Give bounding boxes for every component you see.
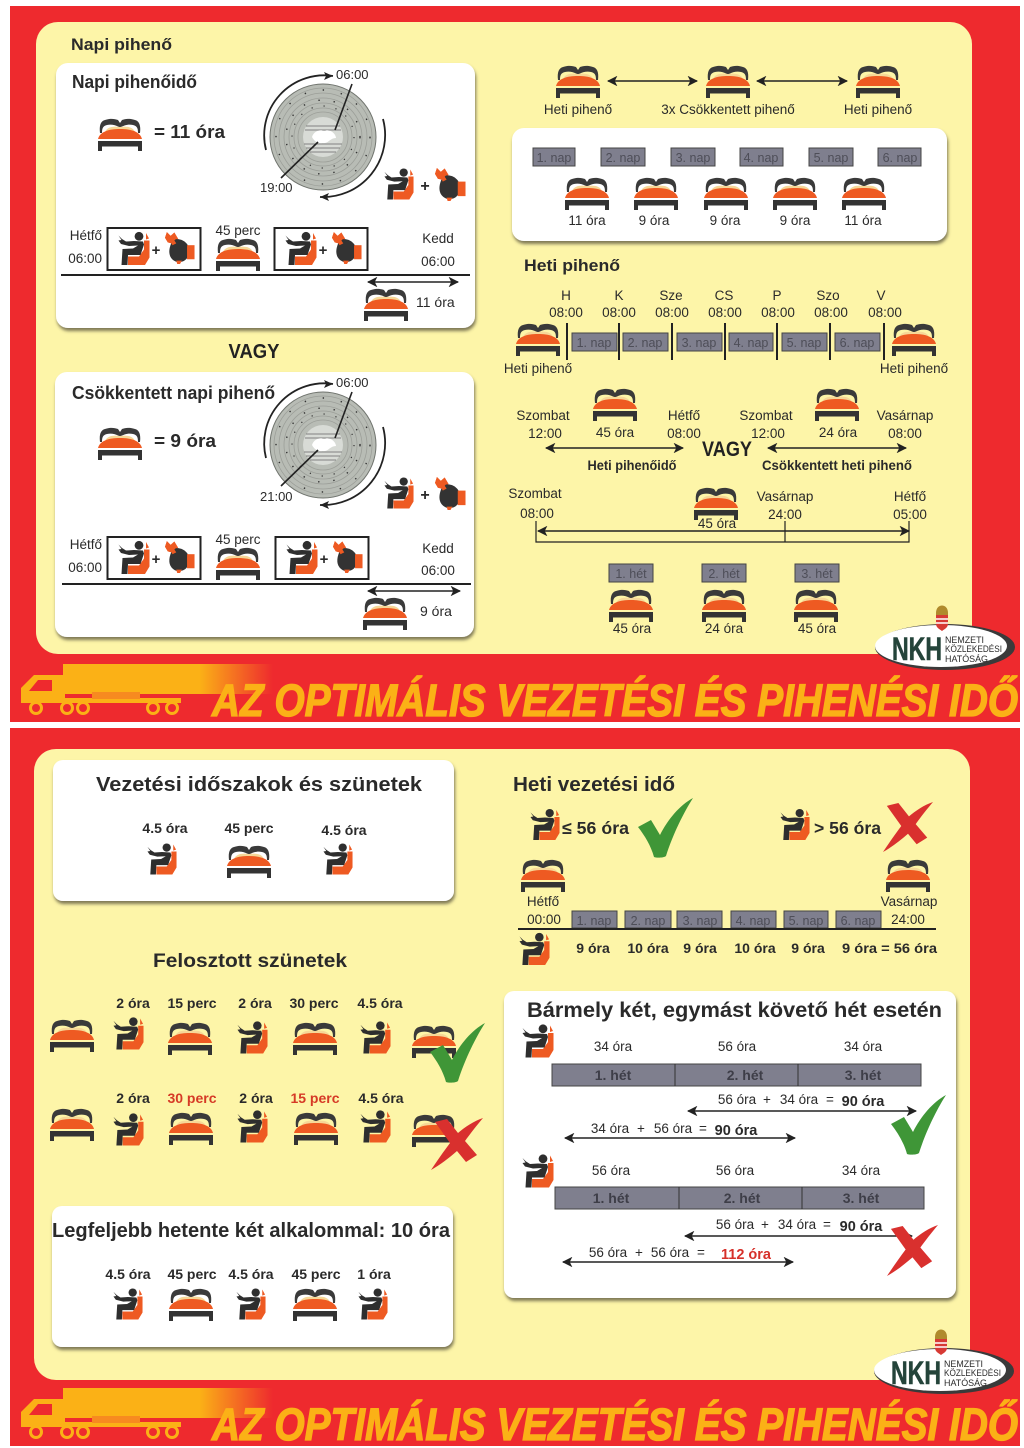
timeline: six days between weekly rests: CS	[715, 288, 733, 303]
scenario: allowed 90 hours: 34 óra	[594, 1039, 633, 1054]
timeline: 56 hour week: 6. nap	[841, 914, 875, 928]
diagram: reduced weekly rest 24 hours: 24 óra	[819, 425, 858, 440]
sequence: incorrect split break: 2 óra	[239, 1090, 273, 1106]
diagram: reduced weekly rest 24 hours	[739, 389, 933, 473]
timeline rule	[61, 274, 470, 276]
icon: driving plus other work	[384, 477, 466, 510]
sequence: drive, break, drive: 45 perc	[224, 820, 274, 836]
timeline labels Tuesday: 06:00	[421, 254, 455, 269]
timeline: six days between weekly rests: 6. nap	[840, 336, 874, 350]
diagram: Saturday to Monday span: 45 óra	[698, 516, 737, 531]
rule: up to 56 hours allowed: ≤ 56 óra	[562, 818, 629, 838]
diagram: weekly rest with reduced rests: Heti pihenő	[844, 102, 912, 117]
value: 11 óra: = 11 óra	[154, 122, 226, 142]
day boxes: 4. nap	[744, 151, 778, 165]
sequence: drive, break, drive	[142, 820, 367, 878]
timeline: six days between weekly rests: K	[614, 288, 624, 303]
diagram: Saturday to Monday span: Vasárnap	[757, 489, 813, 504]
scenario: forbidden 112 hours: =	[823, 1217, 831, 1232]
timeline: six days between weekly rests: 08:00	[549, 305, 583, 320]
diagram: full weekly rest 45 hours: Heti pihenőidő	[588, 458, 676, 473]
day boxes: 3. nap	[676, 151, 710, 165]
scenario: allowed 90 hours: 56 óra	[718, 1092, 757, 1107]
logo: NKH bottom: NEMZETI	[944, 1359, 983, 1369]
scenario: forbidden 112 hours: 56 óra	[716, 1217, 755, 1232]
logo: NKH bottom	[874, 1330, 1014, 1394]
scenario: allowed 90 hours: 56 óra	[654, 1121, 693, 1136]
icon: driving plus other work: +	[420, 178, 430, 195]
timeline: six days between weekly rests: Heti pihenő	[880, 361, 948, 376]
sequence: 10 hour day: 1 óra	[357, 1266, 391, 1282]
box: work block 1: +	[152, 242, 161, 259]
timeline: 56 hour week: 9 óra = 56 óra	[842, 940, 937, 956]
panel: top red board	[10, 6, 1020, 722]
diagram: full weekly rest 45 hours: 45 óra	[596, 425, 635, 440]
day boxes	[533, 148, 921, 166]
timeline labels Monday: 06:00	[68, 560, 102, 575]
diagram: three weeks of weekly rest	[609, 564, 839, 636]
sequence: incorrect split break: 30 perc	[167, 1090, 217, 1106]
timeline: six days between weekly rests: 08:00	[602, 305, 636, 320]
sequence: 10 hour day: 45 perc	[167, 1266, 217, 1282]
diagram: full weekly rest 45 hours	[516, 389, 701, 473]
timeline: six days between weekly rests: 3. nap	[682, 336, 716, 350]
scenario: forbidden 112 hours: =	[697, 1245, 705, 1260]
diagram: Saturday to Monday span: 05:00	[893, 507, 927, 522]
45 minute break: 45 perc	[215, 532, 261, 547]
scenario: allowed 90 hours: =	[826, 1092, 834, 1107]
timeline rule	[62, 583, 471, 585]
rest beds per day: 9 óra	[710, 213, 741, 228]
timeline labels Tuesday: Kedd	[422, 541, 454, 556]
sequence: correct split break: 4.5 óra	[357, 995, 403, 1011]
rest beds per day: 9 óra	[639, 213, 670, 228]
sequence: correct split break: 2 óra	[238, 995, 272, 1011]
icon: cross	[431, 1118, 483, 1170]
scenario: allowed 90 hours: 34 óra	[844, 1039, 883, 1054]
scenario: forbidden 112 hours: 90 óra	[840, 1219, 883, 1235]
sequence: incorrect split break	[50, 1090, 456, 1147]
diagram: Saturday to Monday span: Szombat	[508, 486, 562, 501]
rule: over 56 hours forbidden	[780, 802, 933, 852]
diagram: full weekly rest 45 hours: 12:00	[528, 426, 562, 441]
scenario: allowed 90 hours: 90 óra	[842, 1094, 885, 1110]
chart: tachograph disc 06:00-19:00	[260, 67, 385, 201]
panel: reduced daily rest card	[55, 372, 474, 637]
timeline labels Monday: 06:00	[68, 251, 102, 266]
45 minute break	[215, 223, 261, 271]
diagram: three weeks of weekly rest: 45 óra	[798, 621, 837, 636]
panel: max twice a week 10 hours	[52, 1206, 453, 1347]
rule: up to 56 hours allowed	[530, 798, 693, 858]
timeline: six days between weekly rests: H	[561, 288, 571, 303]
icon: driving plus other work	[384, 168, 466, 201]
timeline: six days between weekly rests: 08:00	[708, 305, 742, 320]
timeline: six days between weekly rests: Szo	[816, 288, 840, 303]
timeline: 56 hour week: 1. nap	[577, 914, 611, 928]
chart: tachograph disc 06:00-21:00: 21:00	[260, 489, 293, 504]
timeline: 56 hour week: 3. nap	[683, 914, 717, 928]
scenario: forbidden 112 hours	[522, 1154, 938, 1276]
card title: Napi pihenőidő	[72, 71, 197, 92]
timeline: 56 hour week: 00:00	[527, 912, 561, 927]
timeline: six days between weekly rests: 5. nap	[787, 336, 821, 350]
box: work block 1: +	[152, 551, 161, 568]
label: VAGY: VAGY	[228, 341, 280, 363]
scenario: allowed 90 hours: +	[763, 1092, 771, 1107]
timeline labels Tuesday	[421, 541, 455, 578]
box: work block 2: +	[320, 551, 329, 568]
day boxes: 2. nap	[606, 151, 640, 165]
timeline: 56 hour week: 9 óra	[683, 940, 717, 956]
timeline: six days between weekly rests: 08:00	[868, 305, 902, 320]
logo: NKH top	[875, 606, 1015, 670]
scenario: allowed 90 hours: 2. hét	[727, 1067, 764, 1083]
arrow: 9 hours span	[368, 590, 460, 592]
timeline: 56 hour week: 5. nap	[789, 914, 823, 928]
sequence: correct split break: 15 perc	[167, 995, 217, 1011]
box: work block 1	[108, 537, 200, 579]
day boxes: 6. nap	[883, 151, 917, 165]
timeline: 56 hour week	[518, 860, 937, 965]
diagram: three weeks of weekly rest: 24 óra	[705, 621, 744, 636]
panel: driving periods and breaks	[53, 760, 454, 901]
scenario: forbidden 112 hours: 3. hét	[843, 1190, 880, 1206]
icon: truck top	[21, 664, 273, 714]
rule: over 56 hours forbidden: > 56 óra	[814, 818, 881, 838]
sequence: incorrect split break: 2 óra	[116, 1090, 150, 1106]
sequence: drive, break, drive: 4.5 óra	[142, 820, 188, 836]
diagram: weekly rest with reduced rests	[544, 66, 912, 117]
rest beds per day: 11 óra	[844, 213, 882, 228]
diagram: three weeks of weekly rest: 45 óra	[613, 621, 652, 636]
card title: Vezetési időszakok és szünetek	[96, 774, 423, 796]
scenario: allowed 90 hours: =	[699, 1121, 707, 1136]
timeline: six days between weekly rests: 2. nap	[628, 336, 662, 350]
logo: NKH bottom: NKH	[891, 1355, 941, 1391]
scenario: allowed 90 hours: 34 óra	[591, 1121, 630, 1136]
scenario: forbidden 112 hours: 56 óra	[589, 1245, 628, 1260]
timeline: six days between weekly rests: 1. nap	[577, 336, 611, 350]
scenario: allowed 90 hours: 90 óra	[715, 1123, 758, 1139]
panel: two consecutive weeks	[504, 991, 956, 1298]
diagram: reduced weekly rest 24 hours: Szombat	[739, 408, 793, 423]
diagram: full weekly rest 45 hours: Hétfő	[668, 408, 700, 423]
timeline labels Monday: Hétfő	[70, 228, 102, 243]
timeline: six days between weekly rests: V	[876, 288, 886, 303]
diagram: full weekly rest 45 hours: 08:00	[667, 426, 701, 441]
scenario: forbidden 112 hours: 34 óra	[778, 1217, 817, 1232]
logo: NKH bottom: KÖZLEKEDÉSI	[944, 1368, 1001, 1378]
diagram: Saturday to Monday span: 24:00	[768, 507, 802, 522]
diagram: three weeks of weekly rest: 1. hét	[615, 567, 647, 581]
logo: NKH top: NKH	[892, 631, 942, 667]
diagram: full weekly rest 45 hours: Szombat	[516, 408, 570, 423]
timeline labels Monday	[68, 228, 102, 266]
timeline labels Monday	[68, 537, 102, 575]
card title: Legfeljebb hetente két alkalommal: 10 óra	[52, 1220, 451, 1242]
timeline labels Monday: Hétfő	[70, 537, 102, 552]
timeline: 56 hour week: 10 óra	[627, 940, 669, 956]
scenario: forbidden 112 hours: 34 óra	[842, 1163, 881, 1178]
sequence: drive, break, drive: 4.5 óra	[321, 822, 367, 838]
sequence: incorrect split break: 15 perc	[290, 1090, 340, 1106]
label: VAGY: VAGY	[702, 438, 752, 461]
timeline: six days between weekly rests: Heti pihenő	[504, 361, 572, 376]
rest block 11 óra: 11 óra	[416, 294, 455, 310]
sequence: correct split break	[50, 995, 456, 1058]
timeline: six days between weekly rests: 4. nap	[734, 336, 768, 350]
diagram: reduced weekly rest 24 hours: 08:00	[888, 426, 922, 441]
timeline: six days between weekly rests: Sze	[659, 288, 683, 303]
icon: bed equals 11 hours	[98, 119, 142, 151]
timeline: 56 hour week: 9 óra	[791, 940, 825, 956]
sequence: 10 hour day: 45 perc	[291, 1266, 341, 1282]
card title: Bármely két, egymást követő hét esetén	[527, 999, 942, 1022]
45 minute break	[215, 532, 261, 580]
heading: Felosztott szünetek: Felosztott szünetek	[153, 951, 347, 972]
diagram: Saturday to Monday span	[508, 486, 927, 542]
box: work block 2	[274, 228, 368, 270]
scenario: forbidden 112 hours: 56 óra	[716, 1163, 755, 1178]
scenario: forbidden 112 hours: 56 óra	[592, 1163, 631, 1178]
sequence: 10 hour day: 4.5 óra	[105, 1266, 151, 1282]
scenario: forbidden 112 hours: 1. hét	[593, 1190, 630, 1206]
timeline labels Tuesday: Kedd	[422, 231, 454, 246]
diagram: three weeks of weekly rest: 3. hét	[801, 567, 833, 581]
logo: NKH top: KÖZLEKEDÉSI	[945, 644, 1002, 654]
timeline: six days between weekly rests: 08:00	[761, 305, 795, 320]
heading: Napi pihenő: Napi pihenő	[71, 36, 172, 54]
scenario: forbidden 112 hours: +	[635, 1245, 643, 1260]
chart: tachograph disc 06:00-21:00	[260, 375, 385, 509]
rest beds per day: 9 óra	[780, 213, 811, 228]
rest block 9 óra	[363, 598, 452, 630]
scenario: allowed 90 hours: 1. hét	[595, 1067, 632, 1083]
box: work block 2: +	[319, 242, 328, 259]
scenario: forbidden 112 hours: 56 óra	[651, 1245, 690, 1260]
scenario: forbidden 112 hours: 2. hét	[724, 1190, 761, 1206]
icon: driving plus other work: +	[420, 487, 430, 504]
rest block 9 óra: 9 óra	[420, 603, 452, 619]
timeline: 56 hour week: 2. nap	[631, 914, 665, 928]
heading: Heti pihenő: Heti pihenő	[524, 256, 620, 275]
card title: Csökkentett napi pihenő	[72, 383, 275, 403]
logo: NKH top: NEMZETI	[945, 635, 984, 645]
sequence: correct split break: 30 perc	[289, 995, 339, 1011]
timeline: 56 hour week: Vasárnap	[881, 894, 937, 909]
scenario: allowed 90 hours: +	[637, 1121, 645, 1136]
timeline: 56 hour week: 4. nap	[736, 914, 770, 928]
rest beds per day: 11 óra	[568, 213, 606, 228]
day boxes: 1. nap	[537, 151, 571, 165]
logo: NKH top: HATÓSÁG	[945, 654, 988, 664]
diagram: reduced weekly rest 24 hours: Csökkentett heti pihenő	[762, 458, 912, 473]
logo: NKH bottom: HATÓSÁG	[944, 1378, 987, 1388]
diagram: weekly rest with reduced rests: Heti pihenő	[544, 102, 612, 117]
scenario: forbidden 112 hours: 112 óra	[721, 1247, 772, 1263]
timeline: 56 hour week: 10 óra	[734, 940, 776, 956]
timeline: six days between weekly rests: 08:00	[814, 305, 848, 320]
chart: tachograph disc 06:00-19:00: 06:00	[336, 67, 369, 82]
diagram: three weeks of weekly rest: 2. hét	[708, 567, 740, 581]
rest block 11 óra	[364, 289, 455, 321]
scenario: allowed 90 hours: 3. hét	[845, 1067, 882, 1083]
sequence: correct split break: 2 óra	[116, 995, 150, 1011]
timeline: six days between weekly rests: P	[772, 288, 782, 303]
timeline labels Tuesday: 06:00	[421, 563, 455, 578]
heading: Heti vezetési idő: Heti vezetési idő	[513, 774, 675, 796]
timeline labels Tuesday	[421, 231, 455, 269]
scenario: allowed 90 hours: 56 óra	[718, 1039, 757, 1054]
timeline: six days between weekly rests: 08:00	[655, 305, 689, 320]
timeline: 56 hour week: 24:00	[891, 912, 925, 927]
panel: daily rest card	[56, 63, 475, 328]
box: work block 2	[276, 537, 368, 579]
timeline: 56 hour week: Hétfő	[527, 894, 559, 909]
panel: bottom red board	[10, 728, 1020, 1446]
icon: check mark	[430, 1023, 485, 1083]
sequence: 10 hour day	[105, 1266, 391, 1321]
diagram: weekly rest with reduced rests: 3x Csökkentett pihenő	[661, 102, 795, 117]
rest beds per day	[565, 178, 886, 228]
diagram: reduced weekly rest 24 hours: 12:00	[751, 426, 785, 441]
icon: bed equals 9 hours	[98, 428, 142, 460]
scenario: allowed 90 hours: 34 óra	[780, 1092, 819, 1107]
sequence: incorrect split break: 4.5 óra	[358, 1090, 404, 1106]
arrow: 11 hours span	[368, 281, 458, 283]
scenario: forbidden 112 hours: +	[761, 1217, 769, 1232]
icon: truck bottom	[21, 1388, 273, 1438]
diagram: Saturday to Monday span: 08:00	[520, 506, 554, 521]
chart: tachograph disc 06:00-19:00: 19:00	[260, 180, 293, 195]
box: work block 1	[108, 228, 200, 270]
sequence: 10 hour day: 4.5 óra	[228, 1266, 274, 1282]
scenario: allowed 90 hours	[522, 1024, 946, 1155]
diagram: reduced weekly rest 24 hours: Vasárnap	[877, 408, 933, 423]
timeline: six days between weekly rests	[504, 288, 948, 376]
chart: tachograph disc 06:00-21:00: 06:00	[336, 375, 369, 390]
45 minute break: 45 perc	[215, 223, 261, 238]
diagram: Saturday to Monday span: Hétfő	[894, 489, 926, 504]
panel: six day rest card	[512, 128, 947, 241]
day boxes: 5. nap	[814, 151, 848, 165]
timeline: 56 hour week: 9 óra	[576, 940, 610, 956]
value: 9 óra: = 9 óra	[154, 431, 217, 451]
